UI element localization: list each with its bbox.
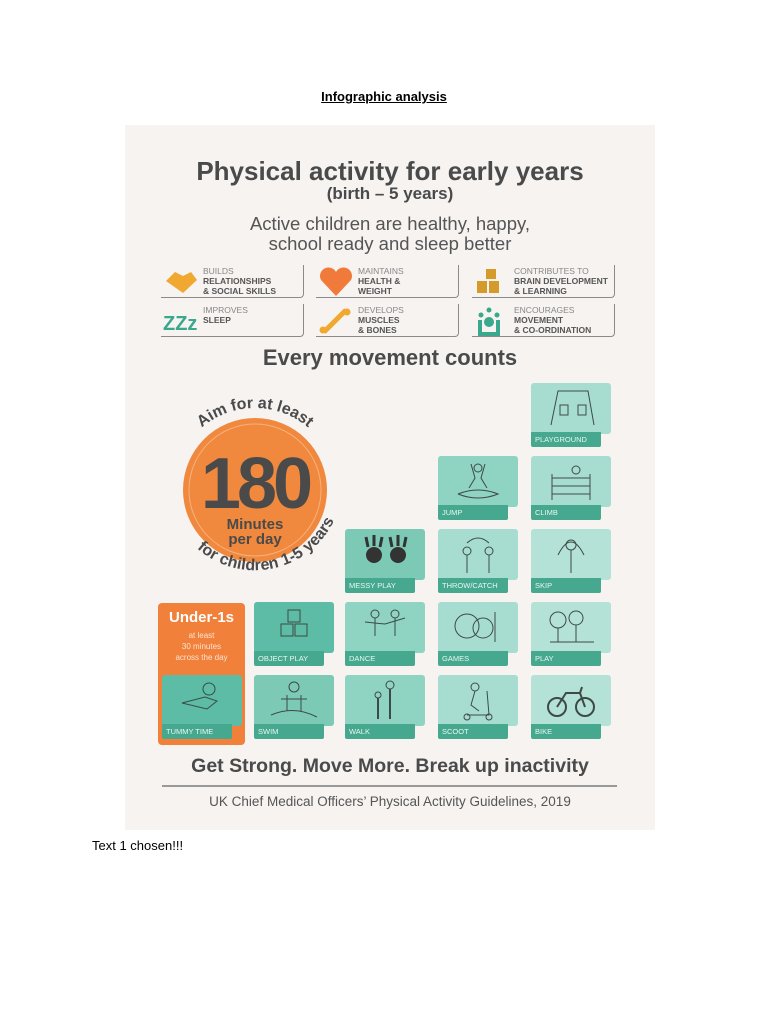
tile: jump bbox=[438, 456, 518, 520]
benefit: relationships: RELATIONSHIPS bbox=[203, 276, 271, 286]
benefit: brain: & LEARNING bbox=[514, 286, 567, 296]
benefit: health: MAINTAINS bbox=[358, 266, 404, 276]
tagline bbox=[250, 213, 530, 254]
poster bbox=[125, 125, 655, 830]
tile: playground bbox=[531, 383, 611, 447]
tile: walk: WALK bbox=[349, 727, 370, 736]
benefit: movement: MOVEMENT bbox=[514, 315, 563, 325]
tile: bike: BIKE bbox=[535, 727, 552, 736]
tile: climb: CLIMB bbox=[535, 508, 558, 517]
under-1s panel: at least bbox=[189, 631, 214, 640]
tile: climb bbox=[531, 456, 611, 520]
divider bbox=[162, 785, 617, 787]
benefit: movement: ENCOURAGES bbox=[514, 305, 574, 315]
tagline: school ready and sleep better bbox=[269, 233, 511, 254]
180 minutes clock: for children 1-5 years bbox=[198, 518, 333, 570]
under-1s panel: 30 minutes bbox=[182, 642, 221, 651]
180 minutes clock: Minutes bbox=[227, 516, 283, 533]
tile: tummy time: TUMMY TIME bbox=[166, 727, 213, 736]
180 minutes clock bbox=[183, 398, 333, 570]
tile: play: PLAY bbox=[535, 654, 554, 663]
under-1s panel bbox=[158, 603, 245, 745]
tile: swim bbox=[254, 675, 334, 739]
benefit: brain: CONTRIBUTES TO bbox=[514, 266, 589, 276]
benefit: muscles bbox=[316, 304, 459, 337]
tile: tummy time bbox=[162, 675, 242, 739]
benefit: movement bbox=[472, 304, 615, 337]
benefit: health: WEIGHT bbox=[358, 286, 392, 296]
page heading: Infographic analysis bbox=[321, 89, 447, 104]
benefit: relationships: BUILDS bbox=[203, 266, 234, 276]
tile: throw/catch bbox=[438, 529, 518, 593]
180 minutes clock: 180 bbox=[201, 444, 311, 524]
180 minutes clock: per day bbox=[228, 531, 282, 548]
title: Physical activity for early years bbox=[196, 156, 584, 186]
tile: throw/catch: THROW/CATCH bbox=[442, 581, 498, 590]
benefit: muscles: DEVELOPS bbox=[358, 305, 404, 315]
tile: games: GAMES bbox=[442, 654, 469, 663]
benefits panel bbox=[161, 265, 615, 337]
benefit: relationships: & SOCIAL SKILLS bbox=[203, 286, 276, 296]
tile: scoot: SCOOT bbox=[442, 727, 469, 736]
tile: games bbox=[438, 602, 518, 666]
tile: messy play: MESSY PLAY bbox=[349, 581, 396, 590]
tagline: Active children are healthy, happy, bbox=[250, 213, 530, 234]
benefit: sleep: ZZz bbox=[163, 313, 197, 335]
benefit: health: HEALTH & bbox=[358, 276, 400, 286]
benefit: brain bbox=[472, 265, 615, 298]
benefit: sleep: IMPROVES bbox=[203, 305, 248, 315]
tile: dance bbox=[345, 602, 425, 666]
footer text: Text 1 chosen!!! bbox=[92, 838, 183, 853]
tile: skip bbox=[531, 529, 611, 593]
benefit: movement: & CO-ORDINATION bbox=[514, 325, 591, 335]
benefit: brain: BRAIN DEVELOPMENT bbox=[514, 276, 608, 286]
benefit: muscles: MUSCLES bbox=[358, 315, 400, 325]
tile: playground: PLAYGROUND bbox=[535, 435, 587, 444]
tile: dance: DANCE bbox=[349, 654, 375, 663]
benefit: muscles: & BONES bbox=[358, 325, 397, 335]
tile: object play bbox=[254, 602, 334, 666]
benefit: sleep: SLEEP bbox=[203, 315, 231, 325]
tile: swim: SWIM bbox=[258, 727, 278, 736]
benefit: relationships bbox=[161, 265, 304, 298]
source citation: UK Chief Medical Officers’ Physical Activity Guidelines, 2019 bbox=[209, 794, 571, 809]
tile: skip: SKIP bbox=[535, 581, 552, 590]
benefit: health bbox=[316, 265, 459, 298]
slogan: Get Strong. Move More. Break up inactivity bbox=[191, 755, 589, 777]
benefit: sleep bbox=[161, 304, 304, 337]
tile: play bbox=[531, 602, 611, 666]
tile: messy play bbox=[345, 529, 425, 593]
180 minutes clock: Aim for at least bbox=[198, 398, 314, 428]
tile: object play: OBJECT PLAY bbox=[258, 654, 308, 663]
heading: every movement counts: Every movement counts bbox=[263, 345, 517, 370]
tile: bike bbox=[531, 675, 611, 739]
tile: jump: JUMP bbox=[442, 508, 462, 517]
activity grid bbox=[254, 383, 611, 739]
under-1s panel: Under-1s bbox=[169, 609, 234, 626]
subtitle: (birth – 5 years) bbox=[327, 184, 453, 203]
tile: walk bbox=[345, 675, 425, 739]
tile: scoot bbox=[438, 675, 518, 739]
under-1s panel: across the day bbox=[175, 653, 228, 662]
